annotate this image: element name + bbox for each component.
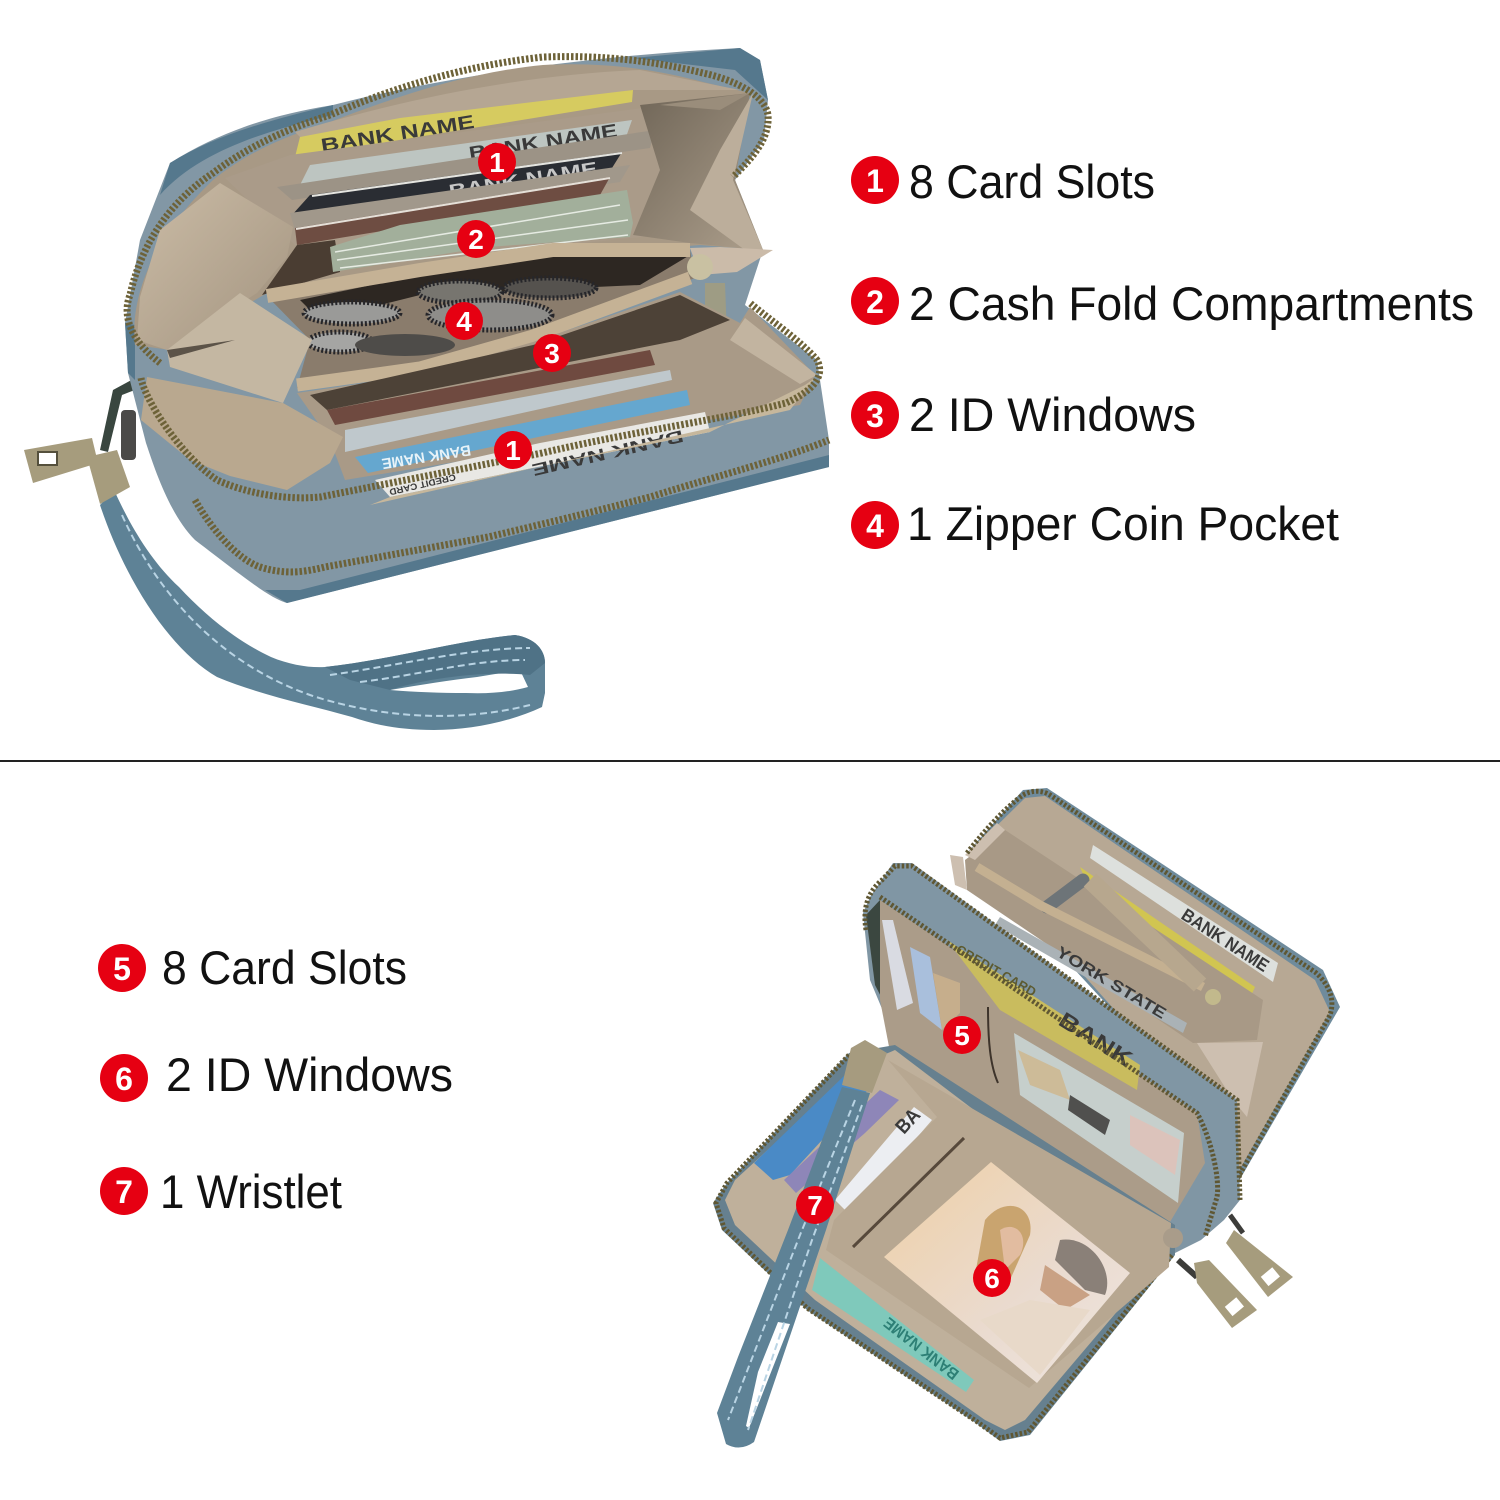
legend item 2: 2	[866, 284, 884, 320]
upper lining	[134, 64, 763, 350]
brown card	[295, 177, 610, 245]
photo marker: 7	[796, 1186, 834, 1224]
left card white	[882, 920, 913, 1010]
card text: back: BANK NAME	[1178, 905, 1273, 976]
white card lower	[375, 412, 710, 497]
lower tan band	[370, 378, 815, 505]
back compartment body	[967, 788, 1340, 1205]
coin pocket zipper tapes	[267, 250, 690, 296]
photo marker: 4: 4	[456, 306, 472, 337]
ID photo window	[884, 1162, 1130, 1383]
zipper slider and pull	[687, 254, 727, 342]
upper left flap	[137, 183, 293, 350]
front panel lining	[725, 1050, 1165, 1430]
photo marker: 7: 7	[807, 1190, 823, 1221]
card text: grey: BANK NAME	[467, 121, 619, 165]
legend item 2: 2 Cash Fold Compartments	[909, 277, 1474, 330]
card slot panel	[225, 95, 740, 270]
front panel body	[713, 1045, 1175, 1441]
legend item 1: 1	[866, 163, 884, 199]
zippers	[127, 57, 768, 363]
slot arc	[988, 1007, 998, 1083]
zipper pull, left	[24, 377, 140, 483]
legend item 3: 2 ID Windows	[909, 388, 1196, 441]
photo marker: 2	[457, 220, 495, 258]
legend item 5: 8 Card Slots	[162, 941, 407, 994]
photo marker: 6: 6	[984, 1263, 1000, 1294]
middle panel lining	[880, 900, 1205, 1222]
white card front	[835, 1107, 932, 1215]
photo marker: 1 lower	[494, 431, 532, 469]
left card blue	[910, 947, 942, 1030]
card text: credit: CREDIT CARD	[388, 472, 457, 497]
legend item 4: 1 Zipper Coin Pocket	[907, 497, 1339, 550]
card text: front: BA	[891, 1104, 925, 1138]
photo marker: 6	[973, 1259, 1011, 1297]
photo marker: 3	[533, 334, 571, 372]
wristlet strap front	[717, 1040, 887, 1448]
brown card lower	[327, 350, 655, 425]
back zipper	[967, 791, 1332, 1195]
legend item 4: 4	[866, 508, 884, 544]
photo marker: 1 upper	[478, 143, 516, 181]
card text: bank: BANK	[1054, 1007, 1137, 1072]
card text: yellow: BANK NAME	[319, 112, 476, 157]
legend item 6: 2 ID Windows	[166, 1048, 453, 1101]
slot front	[853, 1138, 964, 1247]
legend item 6: 6	[115, 1061, 133, 1097]
middle panel body	[863, 863, 1240, 1253]
wallet body	[125, 48, 829, 603]
photo marker: 2: 2	[468, 224, 484, 255]
card text: credit: CREDIT CARD	[954, 942, 1039, 1000]
slot band 1	[277, 130, 655, 200]
lower compartment back	[297, 292, 815, 480]
coin pocket interior	[267, 250, 695, 388]
card text: white: BANK NAME	[530, 426, 685, 479]
zipper slider	[1163, 1215, 1243, 1277]
back compartment lining	[972, 796, 1330, 1195]
middle panel dark edge	[866, 900, 893, 1020]
purple card front	[784, 1090, 899, 1193]
ID strip	[995, 917, 1187, 1033]
photo marker: 1 upper: 1	[489, 147, 505, 178]
slot band 2	[290, 165, 630, 230]
legend item 7: 1 Wristlet	[160, 1165, 342, 1218]
top wallet photo	[24, 48, 829, 730]
lower zipper tape	[297, 278, 690, 385]
card text: ID strip: YORK STATE	[1053, 944, 1169, 1023]
blue card front	[754, 1075, 868, 1180]
front zipper	[716, 1055, 1172, 1438]
cash	[330, 190, 633, 272]
coin pocket back	[950, 823, 1263, 1117]
bottom wallet photo	[713, 788, 1340, 1448]
shadow under cards	[262, 240, 340, 295]
lower left flap	[141, 377, 343, 490]
zipper pull 1	[1226, 1230, 1293, 1297]
legend item 7: 7	[115, 1174, 133, 1210]
pocket side tab	[690, 247, 773, 275]
divider	[0, 760, 1500, 762]
zipper pull 2	[1194, 1260, 1257, 1328]
photo marker: 5: 5	[954, 1020, 970, 1051]
leather edges	[125, 48, 829, 603]
coins	[304, 278, 596, 356]
legend item 3: 3	[866, 398, 884, 434]
yellow card back	[1080, 867, 1255, 998]
white card back	[1090, 845, 1278, 982]
card text: dark: BANK NAME	[447, 159, 599, 203]
teal card	[812, 1258, 974, 1392]
photo marker: 1 lower: 1	[505, 435, 521, 466]
yellow card middle	[947, 940, 1140, 1090]
blue card lower	[355, 390, 690, 473]
yellow card	[295, 90, 633, 157]
wristlet strap	[87, 450, 545, 730]
middle flap	[167, 293, 312, 403]
photo marker: 5	[943, 1016, 981, 1054]
grey card lower	[345, 370, 672, 452]
photo marker: 4	[445, 302, 483, 340]
ID window top	[1014, 1033, 1184, 1203]
dark card	[292, 152, 622, 215]
legend item 1: 8 Card Slots	[909, 155, 1155, 208]
top stitched band	[295, 70, 740, 137]
legend item 5: 5	[113, 951, 131, 987]
left card tan	[933, 973, 960, 1030]
grey card	[300, 120, 632, 185]
right inner wall	[633, 93, 763, 250]
ID panel front	[826, 1060, 1171, 1388]
middle zippers	[865, 866, 1240, 1200]
photo marker: 3: 3	[544, 338, 560, 369]
card text: blue: BANK NAME	[380, 441, 472, 472]
card text: teal: BANK NAME	[881, 1313, 962, 1382]
